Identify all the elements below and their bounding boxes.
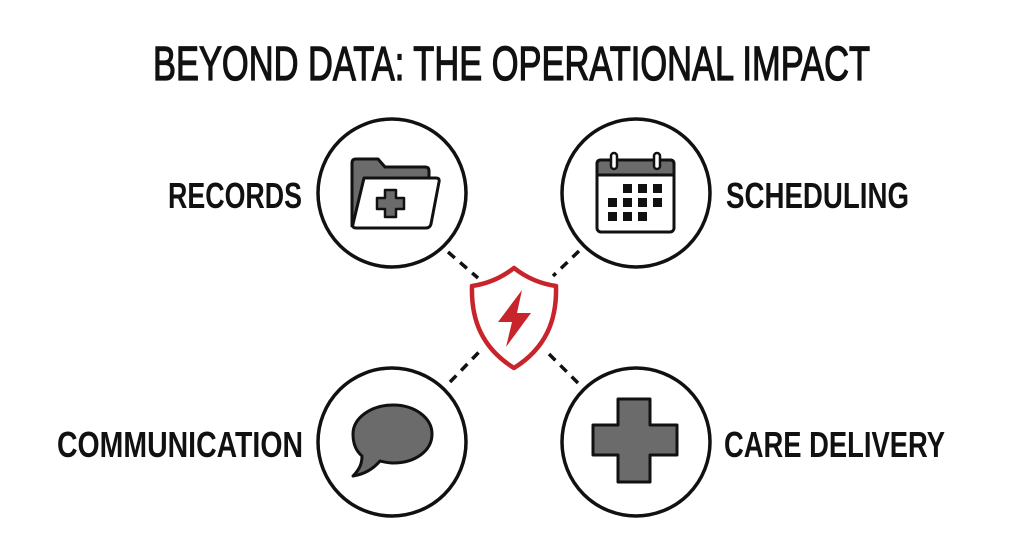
label: communication: COMMUNICATION [57,424,303,465]
label: scheduling: SCHEDULING [726,175,909,216]
icon: speech bubble [353,405,432,476]
node: records [168,119,466,267]
label: records: RECORDS [168,175,302,216]
node: care delivery [562,368,945,516]
icon: medical folder [352,159,439,228]
node: scheduling [562,119,909,267]
center shield icon [472,268,556,368]
icon: medical cross [593,399,677,482]
icon: calendar [597,153,674,232]
connector lines [448,251,579,383]
label: care delivery: CARE DELIVERY [724,424,945,465]
node: communication [57,368,466,516]
